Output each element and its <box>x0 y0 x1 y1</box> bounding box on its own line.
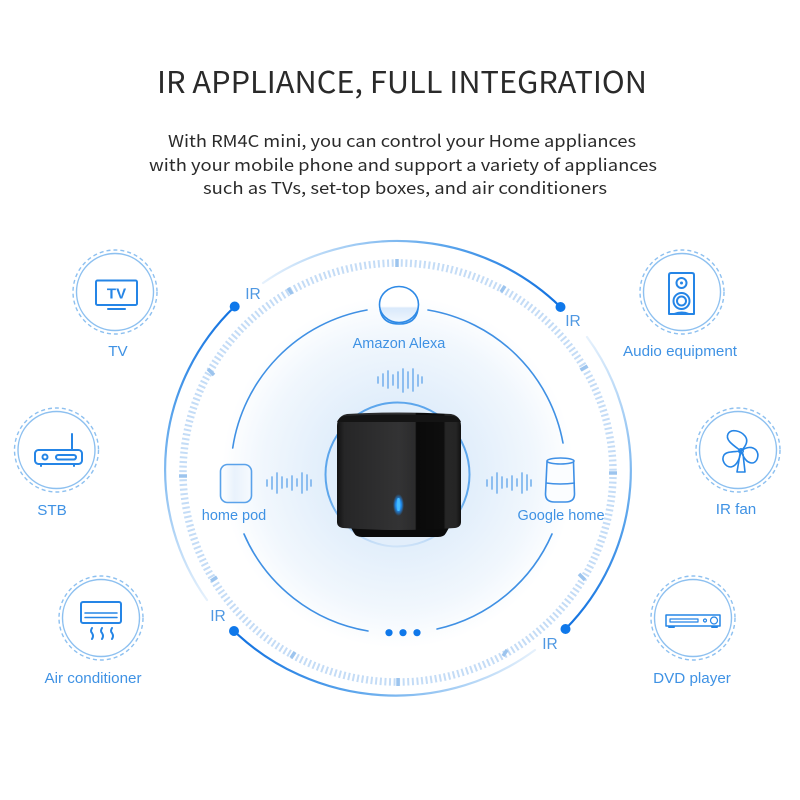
label: IR fan: IR fan <box>716 501 756 518</box>
icon: home pod <box>220 464 252 502</box>
device: STB <box>14 408 98 492</box>
IR labels: IR <box>245 286 261 303</box>
inner ring arcs <box>233 310 563 631</box>
device: DVD player <box>651 576 735 660</box>
IR labels: IR <box>565 313 581 330</box>
label: Audio equipment: Audio equipment <box>623 343 738 360</box>
title: IR APPLIANCE, FULL INTEGRATION <box>157 58 647 102</box>
device: IR fan <box>696 408 780 492</box>
intro text: with your mobile phone and support a variety of appliances <box>149 152 657 176</box>
device: TV: TV <box>107 286 126 302</box>
sound wave: right <box>487 473 531 493</box>
label: Amazon Alexa: Amazon Alexa <box>353 336 446 352</box>
intro text <box>149 128 657 199</box>
label: home pod: home pod <box>202 508 266 524</box>
label: TV: TV <box>108 343 129 360</box>
device: Audio equipment <box>640 250 724 334</box>
IR ring dots <box>229 302 570 636</box>
device ring <box>326 402 470 546</box>
IR labels <box>210 286 581 653</box>
sound wave: top <box>378 369 422 392</box>
IR labels: IR <box>210 608 226 625</box>
label: Air conditioner: Air conditioner <box>44 670 142 687</box>
intro text: such as TVs, set-top boxes, and air conditioners <box>203 175 607 199</box>
central glow <box>222 296 574 648</box>
icon: Google home <box>546 458 575 502</box>
label: DVD player: DVD player <box>653 670 731 687</box>
icon: Amazon Alexa <box>380 286 418 324</box>
label: STB: STB <box>37 502 67 519</box>
device: RM4C mini <box>337 412 461 537</box>
sound wave: left <box>267 473 311 493</box>
outer IR ring arcs <box>165 241 631 696</box>
device: Air conditioner <box>59 576 143 660</box>
pagination dots <box>385 629 421 636</box>
label: Google home: Google home <box>517 508 605 524</box>
intro text: With RM4C mini, you can control your Home appliances <box>168 128 636 152</box>
device: TV <box>73 250 157 334</box>
IR labels: IR <box>542 636 558 653</box>
tick ring <box>179 259 617 686</box>
